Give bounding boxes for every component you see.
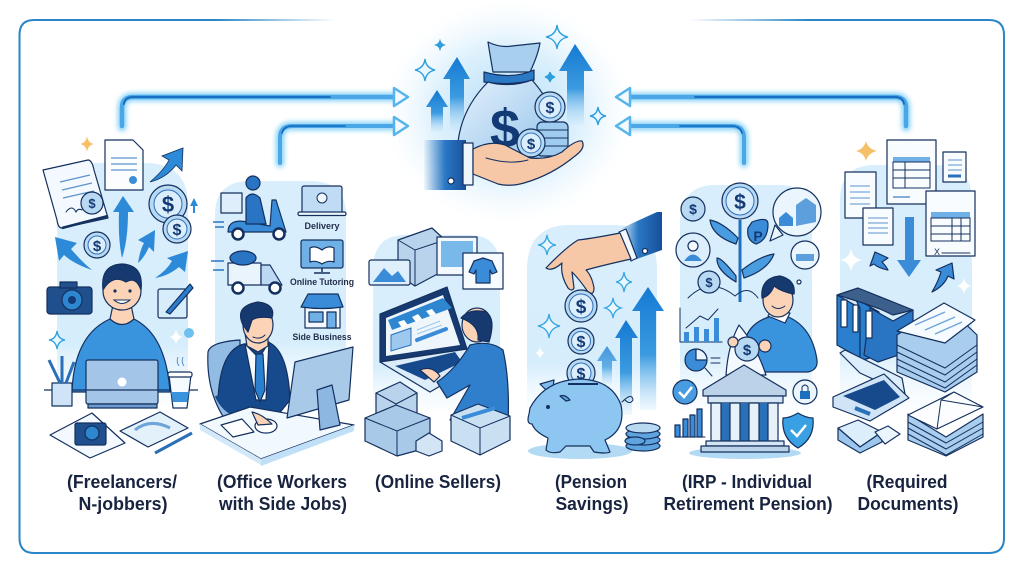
icon: money pouch bbox=[726, 325, 771, 375]
icon: parcel box bbox=[398, 228, 445, 286]
icon: line chart bbox=[680, 308, 722, 342]
icon: small bar chart bbox=[675, 409, 705, 437]
icon: desktop monitor bbox=[287, 347, 353, 430]
icon: pencil cup bbox=[49, 356, 74, 406]
person: office worker bbox=[218, 302, 290, 420]
icon: sparkles bbox=[535, 235, 632, 359]
icon: house bubble bbox=[770, 188, 821, 241]
icon: spreadsheet form: X bbox=[934, 247, 940, 257]
icon: camera bbox=[47, 282, 92, 314]
icon: gold sparkle bbox=[856, 141, 877, 161]
label: online sellers: (Online Sellers) bbox=[375, 472, 501, 492]
icon: contract scroll: $ bbox=[88, 196, 96, 211]
icon: laptop with online shop bbox=[380, 287, 474, 392]
icon: desk bbox=[200, 407, 354, 466]
icon: paper stack bbox=[897, 303, 977, 392]
icon: check badge bbox=[673, 380, 697, 404]
panel: online sellers bbox=[365, 228, 510, 456]
icon: shield bbox=[783, 413, 813, 448]
icon: small receipt bbox=[943, 152, 966, 182]
icon: pen and note bbox=[158, 284, 193, 318]
icon: money bag: $ bbox=[490, 99, 520, 159]
icon: money pouch: $ bbox=[743, 342, 752, 359]
icon: falling coins bbox=[565, 290, 597, 387]
person: seller bbox=[420, 308, 508, 425]
icon: gold sparkle bbox=[80, 136, 94, 152]
icon: sparkles bbox=[840, 248, 971, 294]
label: required documents: Documents) bbox=[858, 494, 958, 514]
icon: money tree: $ bbox=[705, 275, 713, 290]
icon: money tree: $ bbox=[689, 201, 697, 217]
icon: pie chart bbox=[685, 349, 720, 376]
icon: coin stacks bbox=[625, 423, 660, 451]
icon: contract scroll bbox=[43, 160, 108, 228]
icon: large form bbox=[887, 140, 936, 204]
person: freelancer bbox=[72, 264, 170, 392]
icon: office chair bbox=[208, 340, 240, 418]
icon: reaching hand bbox=[546, 212, 662, 293]
icon: coin stack in bag hand bbox=[517, 92, 568, 157]
text: online tutoring: Online Tutoring bbox=[290, 277, 354, 288]
icon: pension bank building bbox=[689, 365, 801, 459]
icon: laptop bbox=[86, 360, 158, 408]
icon: rising arrows bbox=[55, 148, 198, 278]
panel: freelancers bbox=[43, 136, 198, 458]
icon: delivery trike bbox=[211, 251, 282, 294]
icon: coins bbox=[84, 185, 191, 258]
icon: binders bbox=[837, 288, 913, 362]
icon: storefront bbox=[301, 294, 343, 328]
icon: money tree: P bbox=[753, 228, 763, 244]
label: freelancers: N-jobbers) bbox=[78, 494, 168, 514]
label: pension savings: (Pension bbox=[555, 472, 627, 492]
icon: sparkles around bag bbox=[415, 25, 606, 125]
arrow: office workers to bag bbox=[280, 117, 408, 163]
icon: document arrows bbox=[870, 217, 954, 292]
label: office workers: with Side Jobs) bbox=[218, 494, 347, 514]
icon: document bbox=[105, 140, 143, 190]
icon: coin stack in bag hand: $ bbox=[527, 136, 536, 153]
icon: growth arrows bbox=[597, 287, 664, 415]
icon: shirt card bbox=[463, 253, 503, 289]
icon: delivery scooter bbox=[213, 176, 286, 240]
icon: coins: $ bbox=[93, 238, 102, 255]
icon: stacked parcels bbox=[365, 382, 510, 456]
icon: coins: $ bbox=[162, 192, 174, 217]
icon: coins: $ bbox=[173, 222, 182, 239]
panel: pension savings bbox=[527, 212, 664, 459]
icon: coffee cup bbox=[168, 357, 192, 408]
label: IRP: (IRP - Individual bbox=[682, 472, 812, 492]
icon: money tree: $ bbox=[734, 191, 746, 214]
arrow: required documents to bag bbox=[616, 88, 906, 127]
icon: small bubble bbox=[791, 241, 819, 284]
label: required documents: (Required bbox=[866, 472, 948, 492]
icon: piggy bank bbox=[528, 379, 633, 459]
panel: required documents bbox=[833, 140, 983, 456]
icon: laptop with tutor bbox=[298, 186, 346, 216]
icon: falling coins: $ bbox=[576, 297, 587, 318]
panel: office workers with side jobs bbox=[200, 176, 354, 466]
arrow: IRP to bag bbox=[616, 117, 744, 163]
icon: online tutoring monitor bbox=[301, 240, 343, 273]
icon: coin stack in bag hand: $ bbox=[546, 100, 555, 117]
icon: open hand bbox=[424, 140, 583, 190]
icon: scanner bbox=[833, 350, 909, 421]
label: office workers: (Office Workers bbox=[217, 472, 347, 492]
text: side business: Side Business bbox=[292, 332, 352, 343]
icon: money bag bbox=[458, 42, 558, 165]
label: freelancers: (Freelancers/ bbox=[67, 472, 177, 492]
icon: image card right bbox=[437, 237, 477, 275]
icon: receipt left bbox=[845, 172, 876, 218]
icon: image card left bbox=[369, 260, 410, 285]
icon: small document stacks bbox=[838, 420, 900, 453]
icon: falling coins: $ bbox=[577, 366, 586, 383]
label: pension savings: Savings) bbox=[556, 494, 628, 514]
icon: spreadsheet form bbox=[926, 191, 975, 257]
central money bag and hand bbox=[383, 0, 633, 224]
icon: money tree bbox=[681, 183, 774, 302]
sparkles bbox=[49, 328, 194, 349]
icon: sketches and camera on desk bbox=[50, 412, 192, 458]
arrow: freelancers to bag bbox=[122, 88, 408, 127]
person: IRP man bbox=[745, 276, 817, 372]
table line bbox=[44, 389, 198, 391]
icon: person avatar circle bbox=[676, 233, 710, 267]
icon: envelope stack bbox=[908, 392, 983, 456]
icon: receipt middle bbox=[863, 208, 893, 245]
label: IRP: Retirement Pension) bbox=[664, 494, 832, 514]
icon: lock badge bbox=[793, 380, 817, 404]
icon: falling coins: $ bbox=[577, 334, 586, 351]
text: delivery: Delivery bbox=[304, 221, 340, 232]
panel: IRP bbox=[673, 183, 821, 459]
icon: growth arrows around bag bbox=[426, 44, 593, 132]
